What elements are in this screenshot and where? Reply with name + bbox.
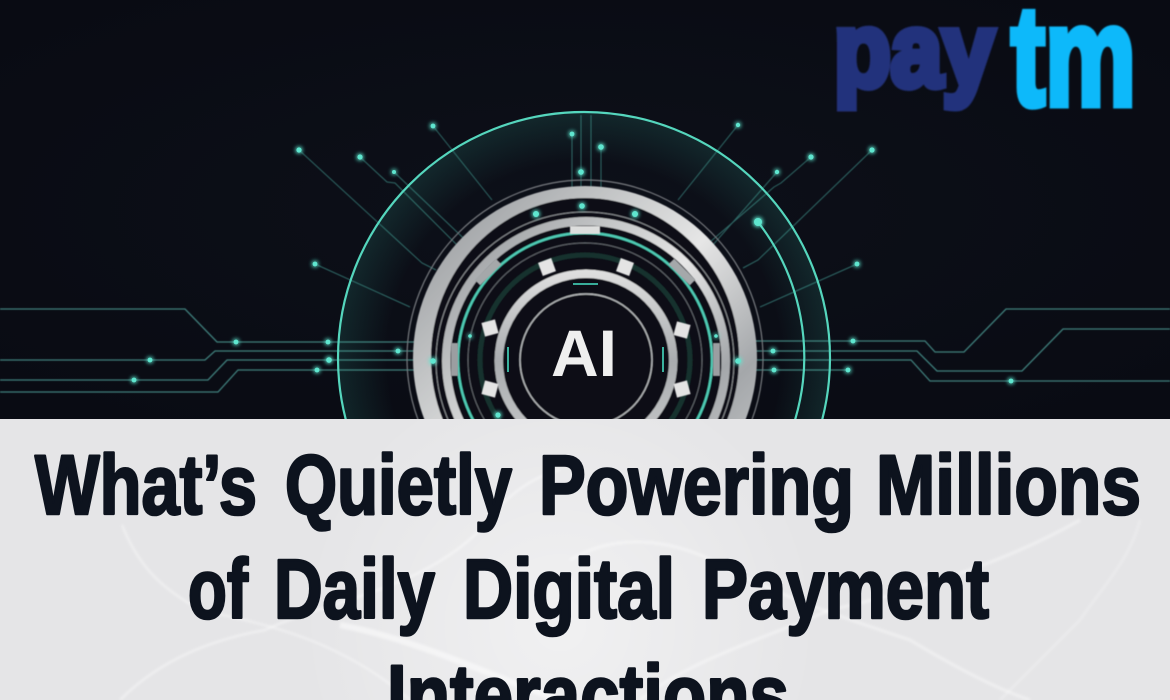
title line 2: Daily [274, 542, 435, 636]
title heading [35, 438, 1141, 700]
glowing circuit nodes [132, 123, 1013, 418]
title line 2 [190, 555, 990, 638]
title line 1: Powering [539, 438, 854, 532]
outer teal ring [336, 110, 832, 419]
title line 2: Digital [463, 542, 675, 636]
title line 1: Quietly [285, 438, 512, 532]
logo: Paytm [834, 0, 1136, 136]
ring blocks: outer segments [451, 226, 720, 376]
title line 2: Payment [702, 542, 989, 636]
chart: radial circuit lines [299, 115, 872, 307]
title line 1: What’s [35, 438, 257, 532]
inner teal arc with node [758, 222, 804, 420]
title line 2: of [188, 542, 249, 636]
chart: left circuit traces [0, 309, 440, 392]
decorative light swirls [268, 610, 1011, 697]
ring blocks: inner squares [481, 258, 691, 398]
teal tick marks [508, 284, 663, 372]
chart: right circuit traces [730, 309, 1170, 381]
concentric silver rings [406, 178, 764, 419]
title line 1 [34, 451, 1140, 534]
panel: dark AI hero image [0, 110, 1170, 419]
AI label: AI [551, 316, 617, 390]
panel: light title area [0, 419, 1170, 700]
